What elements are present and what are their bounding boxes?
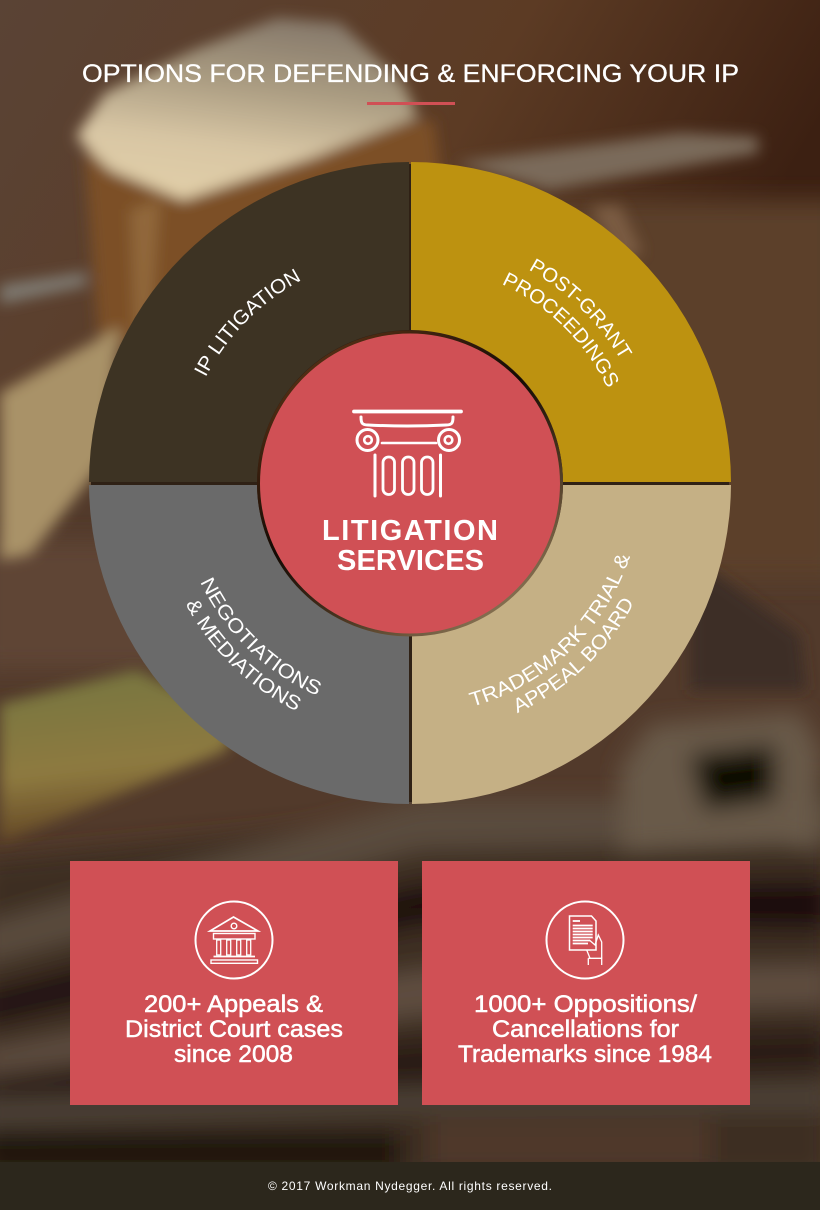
panel: Post-Grant Proceedings <box>411 162 731 482</box>
hub label <box>322 515 498 577</box>
card text <box>458 991 712 1068</box>
hub label: LITIGATION <box>322 515 498 547</box>
icon: document in hand <box>546 902 624 978</box>
card text: since 2008 <box>174 1041 293 1068</box>
hub label: SERVICES <box>337 545 484 577</box>
card text: District Court cases <box>125 1016 343 1043</box>
stat card: oppositions <box>422 861 750 1105</box>
panel: Trademark Trial & Appeal Board <box>412 485 731 804</box>
title underline <box>367 102 455 105</box>
panel: Negotiations & Mediations: NEGOTIATIONS <box>200 577 321 694</box>
panel: Post-Grant Proceedings: PROCEEDINGS <box>503 272 618 386</box>
footer bar <box>0 1162 820 1210</box>
card text: 1000+ Oppositions/ <box>474 991 697 1018</box>
card text: Trademarks since 1984 <box>458 1041 712 1068</box>
panel: Trademark Trial & Appeal Board: APPEAL BOARD <box>516 598 632 714</box>
card text: 200+ Appeals & <box>144 991 323 1018</box>
panel: IP Litigation <box>89 162 409 482</box>
panel: Post-Grant Proceedings: POST-GRANT <box>530 258 632 356</box>
panel: Trademark Trial & Appeal Board: TRADEMARK TRIAL & <box>468 555 630 706</box>
donut diagram <box>89 162 731 804</box>
panel: Negotiations & Mediations <box>89 485 409 804</box>
center hub: Litigation Services <box>258 332 562 635</box>
title: OPTIONS FOR DEFENDING & ENFORCING YOUR IP <box>82 60 739 88</box>
icon: ionic column <box>354 412 461 496</box>
card text <box>125 991 343 1068</box>
icon: courthouse <box>196 902 272 978</box>
card text: Cancellations for <box>492 1016 679 1043</box>
panel: IP Litigation: IP LITIGATION <box>194 268 300 376</box>
stat card: court cases <box>70 861 398 1105</box>
footer text: © 2017 Workman Nydegger. All rights reserved. <box>268 1179 552 1193</box>
panel: Negotiations & Mediations: & MEDIATIONS <box>187 601 300 710</box>
